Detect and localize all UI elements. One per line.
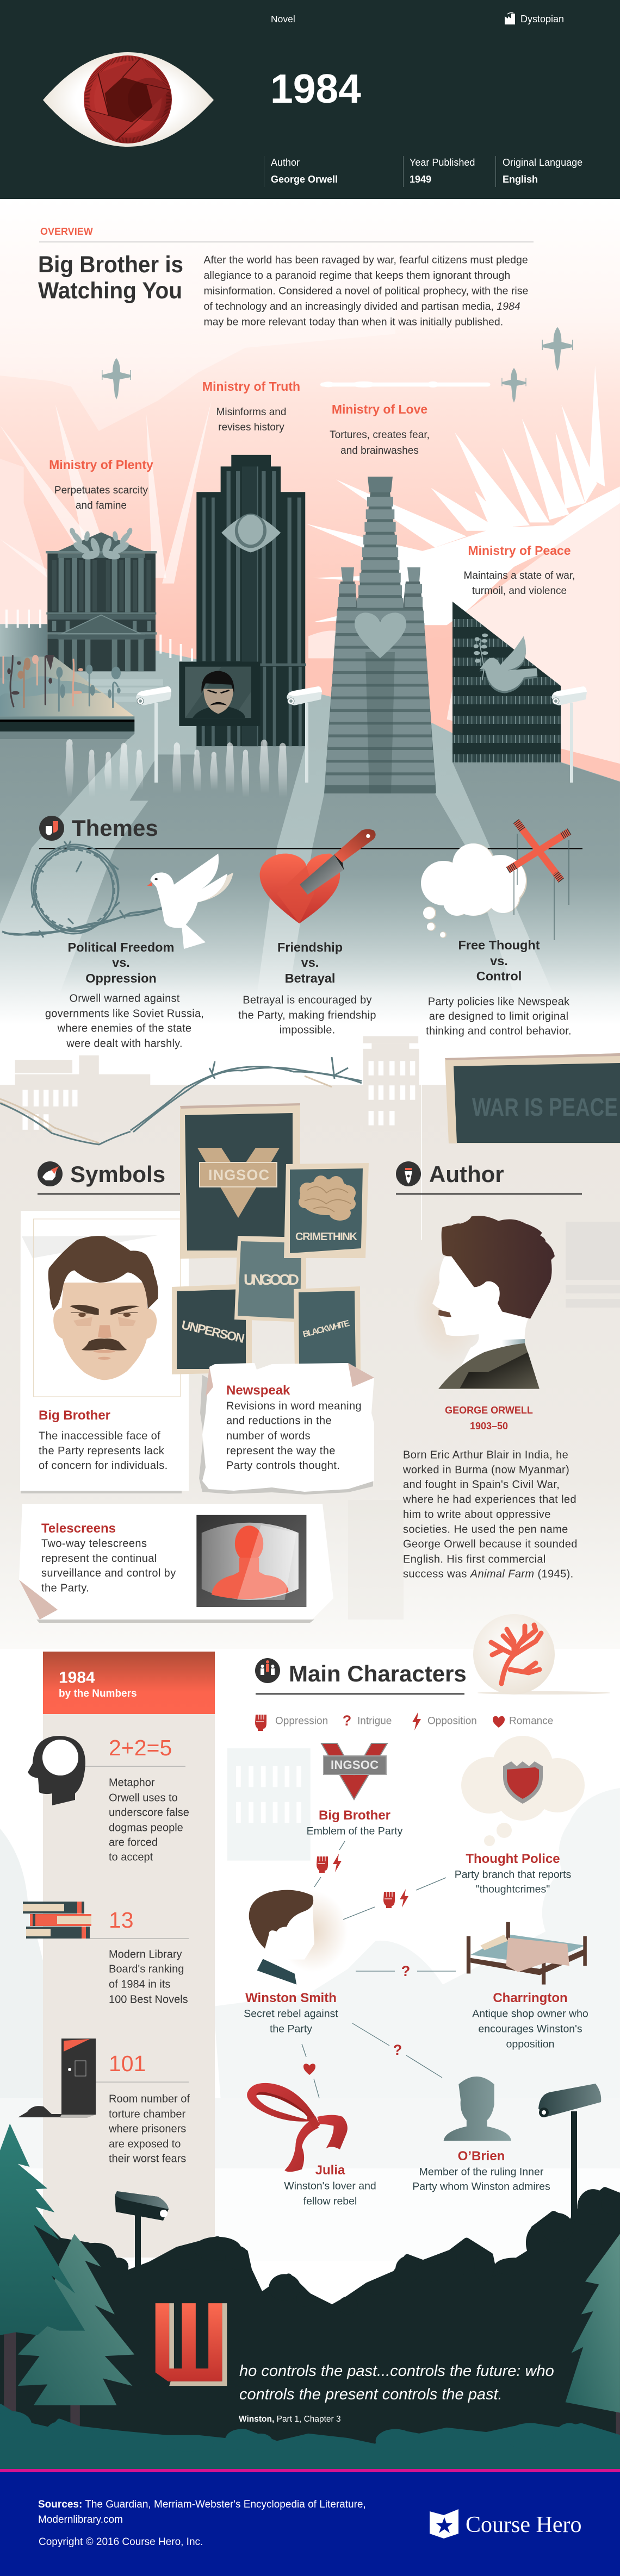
logo: Course Hero bbox=[430, 2509, 581, 2539]
building: Ministry of Love bbox=[324, 477, 436, 793]
character: Charrington: Charrington bbox=[493, 1991, 568, 2005]
stat: 13: 13 bbox=[109, 1908, 134, 1933]
theme: political freedom: Oppression bbox=[85, 971, 157, 985]
character: Charrington: Antique shop owner who bbox=[472, 2008, 588, 2019]
legend bbox=[255, 1712, 553, 1731]
Ministry of Plenty label: and famine bbox=[76, 500, 127, 511]
relation: Big Brother to Winston bbox=[314, 1841, 345, 1887]
meta: language bbox=[495, 156, 582, 187]
card: Big Brother bbox=[20, 1211, 189, 1493]
theme: free thought: vs. bbox=[490, 954, 508, 968]
author biography: worked in Burma (now Myanmar) bbox=[402, 1464, 569, 1476]
stat: 13: Board's ranking bbox=[109, 1963, 184, 1975]
legend: Opposition bbox=[427, 1715, 477, 1727]
theme: friendship: the Party, making friendship bbox=[238, 1010, 376, 1022]
card: Big Brother: The inaccessible face of bbox=[39, 1430, 160, 1442]
author biography: success was Animal Farm (1945). bbox=[403, 1568, 574, 1580]
stat: 101: torture chamber bbox=[109, 2109, 186, 2121]
overview headline: Big Brother is bbox=[38, 252, 183, 278]
stat: 2+2=5 bbox=[85, 1735, 189, 1863]
meta: year bbox=[403, 156, 475, 187]
icon: bird bbox=[38, 1161, 63, 1186]
sky background bbox=[0, 199, 620, 788]
character: Winston Smith: Winston Smith bbox=[245, 1991, 337, 2005]
theme: free thought: Control bbox=[476, 969, 522, 983]
meta: author: Author bbox=[271, 157, 300, 168]
Ministry of Plenty label bbox=[49, 458, 153, 511]
overview paragraph: may be more relevant today than when it was initially published. bbox=[203, 316, 503, 328]
icon: books bbox=[23, 1902, 91, 1939]
panel: themes bbox=[2, 815, 582, 1050]
meta: language: Original Language bbox=[503, 157, 582, 168]
icon: people bbox=[255, 1658, 280, 1683]
character: Winston Smith bbox=[244, 1890, 348, 2035]
character: Julia bbox=[247, 2083, 376, 2208]
meta: year: Year Published bbox=[410, 157, 475, 168]
overview paragraph: of technology and an increasingly divided and partisan media, 1984 bbox=[203, 301, 520, 312]
character: Thought Police bbox=[455, 1736, 585, 1896]
portrait: George Orwell bbox=[413, 1216, 555, 1389]
panel: quote bbox=[156, 2303, 554, 2424]
stat: 2+2=5: Metaphor bbox=[109, 1777, 155, 1789]
author biography: where he had experiences that led bbox=[402, 1493, 576, 1505]
poster: Ingsoc: INGSOC bbox=[208, 1167, 269, 1183]
theme: political freedom: governments like Soviet Russia, bbox=[45, 1008, 204, 1020]
Ministry of Peace label: Maintains a state of war, bbox=[464, 570, 575, 582]
poster: Ungood: UNGOOD bbox=[244, 1271, 299, 1288]
numbers header: 1984 bbox=[59, 1668, 95, 1687]
Ministry of Love label: and brainwashes bbox=[340, 445, 419, 457]
legend: Romance bbox=[509, 1715, 553, 1727]
stat: 13: Modern Library bbox=[109, 1949, 182, 1961]
icon: masks bbox=[39, 816, 64, 841]
trees bbox=[0, 2123, 620, 2436]
poster: war is peace bbox=[445, 1053, 620, 1143]
stat: 2+2=5: dogmas people bbox=[109, 1822, 183, 1834]
novel label: Novel bbox=[271, 14, 295, 24]
relation: Winston to Julia bbox=[302, 2044, 319, 2098]
crop field bbox=[0, 655, 134, 739]
icon: head bbox=[28, 1736, 85, 1805]
overview paragraph: misinformation. Considered a novel of political prophecy, with the rise bbox=[203, 285, 528, 297]
author name: GEORGE ORWELL bbox=[445, 1405, 533, 1416]
character: Thought Police: Party branch that reports bbox=[455, 1868, 572, 1880]
icon: plane left bbox=[102, 358, 131, 399]
relation: Thought Police to Winston bbox=[343, 1878, 446, 1920]
theme: political freedom: where enemies of the state bbox=[57, 1023, 191, 1035]
author biography: him to write about oppressive bbox=[403, 1509, 551, 1521]
character: O'Brien: Party whom Winston admires bbox=[412, 2180, 550, 2192]
bushes bbox=[0, 2405, 620, 2469]
icon: factory bbox=[505, 12, 515, 24]
author biography: societies. He used the pen name bbox=[403, 1524, 568, 1536]
theme: friendship: impossible. bbox=[280, 1024, 335, 1036]
theme: free thought: Party policies like Newspeak bbox=[428, 996, 570, 1008]
character: Big Brother: Big Brother bbox=[319, 1808, 390, 1823]
theme: political freedom bbox=[45, 940, 204, 1050]
sources: The Guardian, Merriam-Webster's Encyclopedia of Literature, bbox=[82, 2499, 366, 2510]
legend: Intrigue bbox=[357, 1715, 392, 1727]
character: Winston Smith: Secret rebel against bbox=[244, 2008, 338, 2019]
card: Telescreens: represent the continual bbox=[41, 1553, 157, 1565]
Ministry of Truth label: Misinforms and bbox=[216, 407, 286, 418]
Ministry of Truth label: Ministry of Truth bbox=[202, 379, 300, 393]
stat: 101: their worst fears bbox=[109, 2153, 186, 2165]
themes heading: Themes bbox=[72, 815, 158, 841]
overview paragraph: allegiance to a paranoid regime that keeps them ignorant through bbox=[203, 270, 510, 282]
stat: 2+2=5: Orwell uses to bbox=[109, 1792, 178, 1804]
icon: door and rat bbox=[18, 2039, 96, 2118]
character: O'Brien: O’Brien bbox=[458, 2149, 505, 2164]
panel: author bbox=[396, 1161, 582, 1580]
meta: author bbox=[264, 156, 338, 187]
character: O'Brien bbox=[412, 2077, 550, 2192]
building: Ministry of Truth bbox=[196, 455, 306, 746]
relation: Winston to O'Brien: ? bbox=[393, 2042, 402, 2058]
card: Big Brother: Big Brother bbox=[39, 1408, 110, 1423]
card: Newspeak: represent the way the bbox=[226, 1445, 336, 1457]
character: Julia: fellow rebel bbox=[303, 2196, 357, 2208]
stat: 2+2=5: are forced bbox=[109, 1837, 158, 1849]
icon: heart bbox=[355, 612, 406, 658]
icon: tower eye bbox=[221, 514, 281, 553]
Ministry of Peace label: turmoil, and violence bbox=[472, 585, 567, 597]
stat: 101: are exposed to bbox=[109, 2138, 181, 2150]
card: Telescreens bbox=[19, 1504, 333, 1623]
character: Charrington: opposition bbox=[506, 2038, 554, 2050]
icon: plane right bbox=[501, 368, 526, 403]
quote text: ho controls the past...controls the future: who bbox=[239, 2362, 554, 2380]
theme: friendship: Friendship bbox=[277, 940, 343, 954]
theme: political freedom: vs. bbox=[112, 955, 130, 970]
stat: 2+2=5: 2+2=5 bbox=[109, 1735, 172, 1760]
Ministry of Plenty label: Perpetuates scarcity bbox=[54, 485, 148, 496]
card: Telescreens: the Party. bbox=[41, 1583, 89, 1595]
footer bbox=[0, 2469, 620, 2576]
character: Big Brother bbox=[307, 1743, 403, 1837]
card: Newspeak: number of words bbox=[226, 1430, 311, 1442]
meta: year: 1949 bbox=[410, 174, 431, 185]
theme: political freedom: were dealt with harshly. bbox=[66, 1038, 183, 1050]
numbers header bbox=[43, 1652, 215, 1714]
character: Winston Smith: the Party bbox=[270, 2023, 312, 2035]
stat: 101: where prisoners bbox=[108, 2123, 186, 2135]
poster: Blackwhite: BLACKWHITE bbox=[302, 1319, 351, 1340]
stat: 13 bbox=[90, 1908, 189, 2005]
icon: white dove bbox=[147, 854, 233, 949]
icon: peace dove bbox=[474, 634, 537, 693]
character: Thought Police: "thoughtcrimes" bbox=[476, 1884, 550, 1896]
poster: Unperson bbox=[172, 1284, 252, 1374]
author biography: English. His first commercial bbox=[403, 1553, 546, 1565]
building: Ministry of Plenty bbox=[46, 527, 157, 671]
meta: language: English bbox=[503, 174, 538, 185]
panel: by the numbers bbox=[18, 1652, 215, 2258]
poster: Unperson: UNPERSON bbox=[180, 1317, 246, 1346]
stat: 2+2=5: to accept bbox=[109, 1851, 153, 1863]
panel: symbols bbox=[19, 1103, 374, 1623]
Ministry of Truth label: revises history bbox=[218, 422, 284, 433]
theme: free thought: thinking and control behavior. bbox=[426, 1025, 572, 1037]
stat: 101: 101 bbox=[109, 2051, 146, 2076]
Ministry of Love label bbox=[330, 402, 430, 457]
card: Newspeak: and reductions in the bbox=[226, 1415, 332, 1427]
poster: telescreen face bbox=[179, 662, 260, 726]
theme: friendship: Betrayal is encouraged by bbox=[243, 995, 372, 1006]
stat: 13: of 1984 in its bbox=[109, 1978, 170, 1990]
forest silhouette bbox=[0, 2123, 620, 2469]
overview paragraph: After the world has been ravaged by war, fearful citizens must pledge bbox=[203, 254, 528, 266]
author biography: George Orwell because it sounded bbox=[403, 1538, 578, 1550]
Ministry of Peace label bbox=[464, 543, 575, 597]
sources: Modernlibrary.com bbox=[38, 2514, 123, 2525]
character: O'Brien: Member of the ruling Inner bbox=[419, 2166, 544, 2178]
author biography: and fought in Spain's Civil War, bbox=[403, 1479, 560, 1491]
title: 1984 bbox=[270, 66, 361, 111]
author heading: Author bbox=[429, 1161, 504, 1187]
icon: coral in egg bbox=[473, 1614, 610, 1695]
Ministry of Love label: Tortures, creates fear, bbox=[330, 429, 430, 441]
numbers header: by the Numbers bbox=[59, 1688, 137, 1699]
icon: heart with knife bbox=[260, 829, 376, 923]
icon: barbed wire wreath bbox=[2, 841, 162, 937]
card: Big Brother: the Party represents lack bbox=[39, 1445, 165, 1457]
Ministry of Truth label bbox=[202, 379, 300, 433]
icon: pen nib bbox=[396, 1161, 421, 1186]
theme: free thought: Free Thought bbox=[458, 938, 540, 952]
laurel wreath bbox=[69, 527, 133, 561]
sources: Sources: bbox=[38, 2499, 82, 2510]
poster: Blackwhite bbox=[294, 1286, 361, 1371]
icon: red eye bbox=[43, 52, 214, 147]
character: Charrington bbox=[467, 1922, 588, 2050]
pale background clouds bbox=[0, 1748, 620, 2109]
character: Julia: Julia bbox=[315, 2163, 345, 2178]
poster: Ingsoc bbox=[180, 1103, 300, 1259]
theme: free thought: are designed to limit original bbox=[429, 1011, 568, 1023]
icon: plane top bbox=[542, 327, 573, 371]
Ministry of Peace label: Ministry of Peace bbox=[468, 543, 571, 558]
theme: friendship: vs. bbox=[301, 955, 319, 970]
faint background buildings bbox=[348, 1222, 620, 1620]
beige background with buildings bbox=[0, 1036, 620, 1649]
overview headline: Watching You bbox=[38, 278, 182, 304]
drop cap W bbox=[156, 2303, 227, 2386]
icon: telescreen bbox=[196, 1515, 306, 1607]
genre label: Dystopian bbox=[520, 14, 564, 24]
card: Newspeak bbox=[199, 1363, 374, 1495]
relation: Winston to O'Brien bbox=[352, 2023, 442, 2078]
cameras in the scene bbox=[136, 686, 587, 783]
icon: thought cloud crossed out bbox=[421, 821, 569, 940]
panel: main characters bbox=[244, 1614, 610, 2208]
panel: header bbox=[0, 0, 620, 199]
main characters heading: Main Characters bbox=[289, 1661, 467, 1686]
poster: war is peace: WAR IS PEACE bbox=[472, 1093, 618, 1121]
card: Telescreens: Two-way telescreens bbox=[41, 1538, 147, 1550]
poster: Crimethink bbox=[284, 1163, 369, 1258]
card: Newspeak: Revisions in word meaning bbox=[226, 1400, 362, 1412]
overview headline bbox=[38, 252, 183, 304]
copyright: Copyright © 2016 Course Hero, Inc. bbox=[39, 2536, 203, 2548]
author biography: Born Eric Arthur Blair in India, he bbox=[403, 1449, 568, 1461]
theme: political freedom: Political Freedom bbox=[68, 940, 174, 954]
meta: author: George Orwell bbox=[271, 174, 338, 185]
theme: friendship: Betrayal bbox=[285, 971, 335, 985]
logo: Course Hero: Course Hero bbox=[466, 2512, 581, 2537]
overview heading: OVERVIEW bbox=[40, 226, 93, 237]
poster: Ungood bbox=[234, 1236, 306, 1322]
character: Julia: Winston's lover and bbox=[284, 2180, 376, 2192]
character: Charrington: encourages Winston's bbox=[478, 2023, 582, 2035]
stat: 101 bbox=[96, 2051, 190, 2165]
character: Thought Police: Thought Police bbox=[466, 1852, 560, 1866]
Ministry of Love label: Ministry of Love bbox=[332, 402, 427, 416]
building: Ministry of Peace bbox=[452, 602, 561, 762]
card: Big Brother: of concern for individuals. bbox=[39, 1460, 168, 1472]
legend: ? bbox=[343, 1712, 351, 1729]
quote text: controls the present controls the past. bbox=[239, 2386, 503, 2403]
relation: Winston to Charrington: ? bbox=[401, 1963, 410, 1979]
ground bbox=[0, 624, 620, 1033]
character: Big Brother: Emblem of the Party bbox=[307, 1825, 403, 1837]
crowd of figures bbox=[65, 739, 287, 797]
icon: brain bbox=[299, 1176, 356, 1221]
author name: 1903–50 bbox=[470, 1421, 508, 1431]
theme: friendship bbox=[238, 940, 376, 1036]
stat: 101: Room number of bbox=[109, 2093, 190, 2105]
card: Newspeak: Party controls thought. bbox=[226, 1460, 340, 1472]
character: Big Brother: INGSOC bbox=[331, 1758, 379, 1772]
legend: Oppression bbox=[275, 1715, 328, 1727]
Ministry of Plenty label: Ministry of Plenty bbox=[49, 458, 153, 472]
stat: 2+2=5: underscore false bbox=[109, 1806, 189, 1818]
portrait: Big Brother bbox=[48, 1236, 158, 1380]
theme: political freedom: Orwell warned against bbox=[69, 992, 180, 1004]
side spires bbox=[338, 567, 423, 607]
card: Telescreens: surveillance and control by bbox=[41, 1567, 176, 1579]
card: Newspeak: Newspeak bbox=[226, 1383, 290, 1398]
theme: free thought bbox=[426, 938, 572, 1037]
cameras near forest bbox=[115, 2084, 601, 2272]
quote attribution: Winston, Part 1, Chapter 3 bbox=[239, 2415, 341, 2424]
barbed wire arch bbox=[0, 1057, 362, 1145]
stat: 13: 100 Best Novels bbox=[109, 1993, 188, 2005]
card: Telescreens: Telescreens bbox=[41, 1521, 116, 1536]
symbols heading: Symbols bbox=[70, 1161, 165, 1187]
field wall bbox=[0, 610, 193, 739]
poster: Crimethink: CRIMETHINK bbox=[295, 1231, 358, 1243]
